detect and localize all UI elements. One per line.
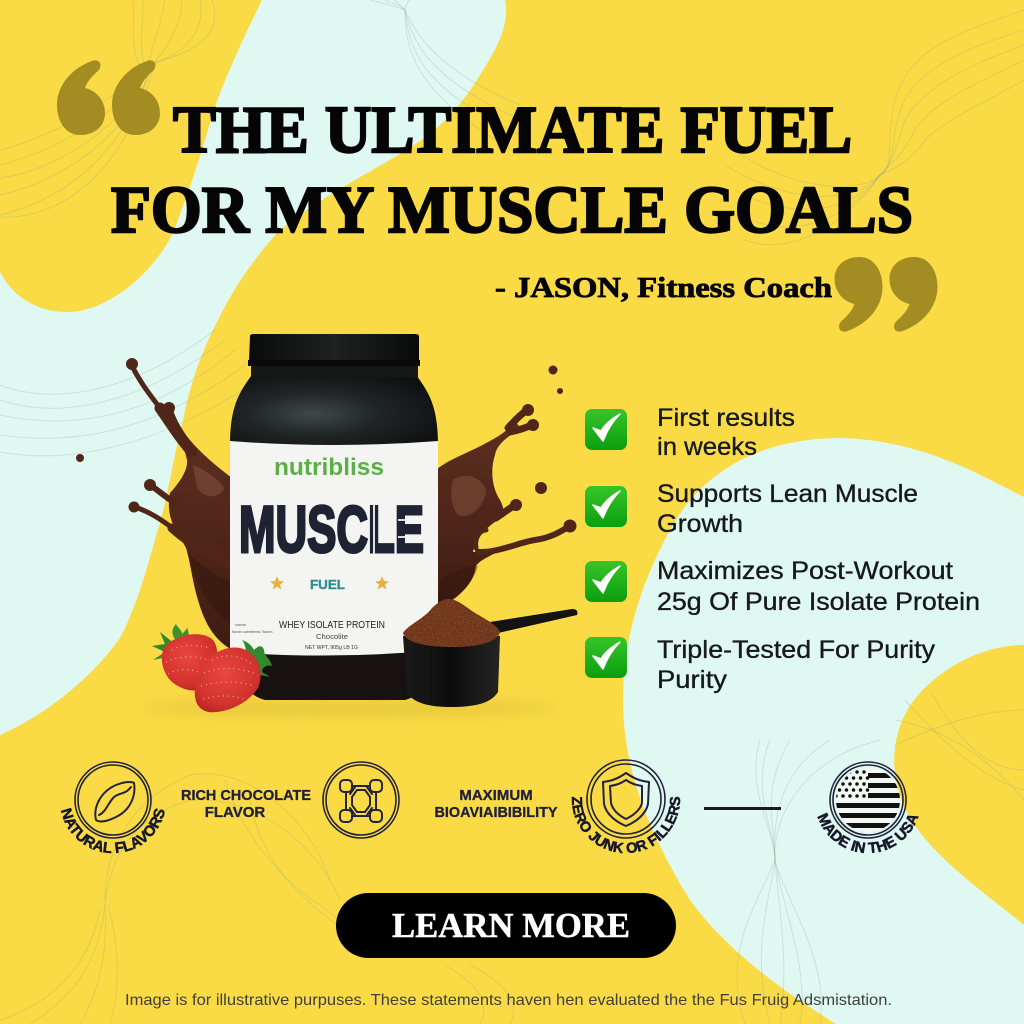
benefit 2 (585, 480, 918, 538)
benefit 4: Purity (657, 666, 728, 694)
button: learn more (336, 893, 676, 958)
small print: natural (235, 623, 246, 627)
text: rich chocolate flavor: FLAVOR (205, 804, 265, 821)
text: maximum bioavailability (434, 787, 558, 821)
star left (270, 576, 284, 590)
scoop (403, 599, 577, 707)
button: learn more: LEARN MORE (392, 906, 630, 945)
product name (239, 492, 426, 566)
benefit 4: Triple-Tested For Purity (657, 636, 936, 664)
small print: flavors sweetened, flavors (232, 630, 273, 634)
title (111, 93, 913, 247)
background blob: mint lower right (623, 438, 1024, 1024)
benefit 1: First results (657, 404, 795, 432)
flag icon (835, 768, 905, 832)
badge: zero junk or fillers: ZERO JUNK OR FILLERS (572, 796, 680, 854)
product illustration (76, 334, 577, 716)
text: rich chocolate flavor: RICH CHOCOLATE (181, 787, 311, 804)
chocolate splash: right (436, 366, 576, 610)
attribution: - JASON, Fitness Coach (495, 273, 832, 304)
tub shoulder (230, 376, 438, 445)
tub (230, 334, 438, 700)
quote mark: closing (834, 257, 938, 332)
scoop handle (490, 609, 577, 633)
badge: natural flavors (60, 761, 165, 854)
star right (375, 576, 389, 590)
text: rich chocolate flavor (181, 787, 311, 821)
tub lid (249, 334, 419, 361)
badge: made in the usa: MADE IN THE USA (817, 812, 919, 854)
product name: MUSCLE (239, 492, 424, 566)
badge: bioavailability network (323, 762, 399, 838)
tub label (230, 441, 438, 656)
fuel label: FUEL (310, 577, 345, 592)
benefit 2: Supports Lean Muscle (657, 480, 918, 508)
benefit 3: 25g Of Pure Isolate Protein (657, 588, 980, 616)
benefit 3 (585, 557, 980, 616)
title: THE ULTIMATE FUEL (173, 93, 852, 167)
background blob: yellow lower right (894, 645, 1024, 925)
label descriptor: WHEY ISOLATE PROTEIN (279, 620, 385, 631)
disclaimer: Image is for illustrative purpuses. These statements haven hen evaluated the the Fus Fruig Adsmistation. (125, 992, 892, 1009)
connector line (704, 807, 781, 810)
benefit 1 (585, 404, 795, 461)
chocolate splash: left (76, 358, 232, 650)
badge: zero junk or fillers (572, 759, 680, 854)
net weight: NET WPT, 905g LB 1G (305, 645, 358, 651)
tub base (232, 645, 436, 700)
text: maximum bioavailability: MAXIMUM (459, 787, 533, 804)
background blob: mint band top and left (0, 0, 506, 735)
benefit 2: Growth (657, 510, 743, 538)
powder mound (403, 599, 500, 647)
text: maximum bioavailability: BIOAVIAIBIBILITY (434, 804, 558, 821)
brand name: nutribliss (274, 454, 384, 481)
benefits list (585, 404, 980, 694)
badge: made in the usa (817, 761, 919, 854)
benefit 4 (585, 636, 936, 694)
ground shadow (140, 700, 560, 716)
scoop cup (403, 636, 500, 707)
benefit 3: Maximizes Post-Workout (657, 557, 953, 585)
flavor: Chocolite (316, 634, 348, 641)
benefit 1: in weeks (657, 433, 757, 461)
title: FOR MY MUSCLE GOALS (111, 173, 913, 247)
small print (232, 623, 273, 634)
quote mark: opening (57, 60, 160, 135)
strawberries (152, 624, 272, 712)
badge: natural flavors: NATURAL FLAVORS (60, 808, 165, 854)
